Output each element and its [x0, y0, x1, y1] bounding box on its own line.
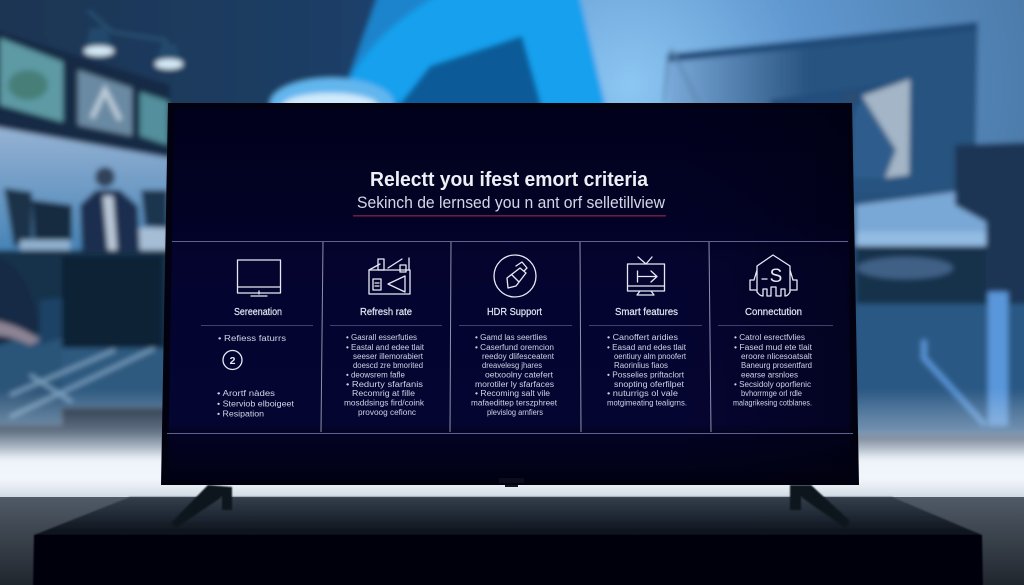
feature bullets: • Gasrall esserfuties	[346, 333, 417, 342]
feature bullets: seeser illemorabiert	[353, 352, 424, 361]
media console	[33, 497, 983, 585]
feature bullets: plevislog arnfiers	[487, 408, 543, 417]
feature bullets: motgimeating tealigrns.	[607, 398, 687, 408]
wall of left monitors	[0, 28, 170, 158]
dark desk	[62, 256, 162, 348]
feature bullets: snopting oferfilpet	[614, 380, 685, 389]
right wall	[570, 0, 1024, 230]
feature bullets	[344, 333, 425, 417]
feature bullets	[217, 334, 295, 418]
feature bullets: • Refiess faturrs	[218, 334, 286, 343]
numbered badge	[223, 350, 242, 370]
feature bullets: • Resipation	[217, 410, 264, 418]
feature bullets: doescd zre bmorited	[353, 361, 423, 370]
column: Refresh rate	[344, 258, 425, 417]
icon: circled pen	[494, 255, 536, 297]
heading block	[353, 169, 666, 217]
column: Smart features	[607, 257, 687, 408]
feature bullets: • nuturrigs ol vale	[607, 389, 679, 398]
feature bullets	[607, 333, 687, 408]
feature bullets: • Gamd las seertlies	[475, 333, 547, 342]
right TV stand leg	[790, 485, 850, 528]
column heading: HDR Support	[487, 307, 542, 318]
comparison table grid	[167, 242, 853, 434]
blue swoosh	[270, 0, 606, 130]
feature bullets: provoog cefionc	[358, 408, 416, 417]
icon: connector with S: S	[770, 266, 782, 287]
feature bullets: • Catrol esrectfvlies	[734, 333, 805, 342]
feature bullets: • Canoffert aridies	[607, 333, 678, 342]
feature bullets: Baneurg prosentfard	[741, 361, 812, 370]
column heading: Sereenation	[234, 307, 282, 318]
feature bullets: Raorinlius fiaos	[614, 361, 668, 370]
feature bullets: eroore nlicesoatsalt	[741, 352, 813, 361]
television screen	[168, 108, 851, 480]
left wall	[0, 125, 170, 270]
icon: refresh card	[369, 258, 410, 294]
feature bullets: oentiury alm pnoofert	[614, 352, 687, 361]
right white desk and room	[852, 142, 1024, 435]
bright back-light band	[0, 390, 1024, 502]
feature bullets	[733, 333, 813, 408]
feature bullets: • Redurty sfarfanis	[346, 380, 423, 389]
console top	[34, 497, 982, 535]
left lower room with chair	[0, 250, 170, 425]
feature bullets: • Secsidoly oporfienic	[734, 380, 811, 389]
column heading: Smart features	[615, 307, 678, 318]
ceiling	[0, 0, 620, 110]
TV brand badge	[499, 478, 524, 487]
feature bullets: mafaedittep terszphreet	[471, 398, 558, 408]
feature bullets: bvhorrmge orl rdle	[741, 389, 803, 398]
left TV stand leg	[171, 485, 232, 528]
subtitle: Sekinch de lernsed you n ant orf selletillview	[357, 193, 666, 212]
feature bullets: dreavelesg jhares	[482, 361, 542, 370]
feature bullets: • Arortf nàdes	[217, 389, 275, 398]
feature bullets: • Sterviob elboigeet	[217, 400, 295, 408]
feature bullets	[471, 333, 558, 417]
feature bullets: • Posselies priftaclort	[607, 370, 685, 380]
feature bullets: mosddsings fird/coink	[344, 398, 425, 408]
feature bullets: reedoy dlifesceatent	[482, 352, 555, 361]
ceiling lamps	[84, 10, 183, 69]
column: Screenation	[217, 260, 295, 418]
feature bullets: • Caserfund oremcion	[475, 343, 554, 352]
feature bullets: eearse arsnloes	[741, 370, 798, 380]
feature bullets: • Easad and edes tlait	[607, 343, 687, 352]
feature bullets: oetxoolny catefert	[485, 370, 554, 380]
title: Relectt you ifest emort criteria	[370, 169, 649, 191]
icon: monitor	[238, 260, 280, 296]
feature bullets: morotiler ly sfarfaces	[475, 380, 554, 389]
icon: connector with S	[750, 255, 797, 296]
column: HDR support	[471, 255, 558, 417]
column heading: Refresh rate	[360, 307, 412, 318]
feature bullets: • Eastal and edee tlait	[346, 343, 425, 352]
feature bullets: Recomrig at fille	[352, 389, 416, 398]
icon: smart TV	[628, 257, 664, 295]
feature bullets: • deowsrem fafle	[346, 370, 406, 380]
console front	[33, 535, 983, 585]
numbered badge: 2	[230, 355, 236, 367]
television frame	[161, 103, 859, 485]
floor	[0, 497, 1024, 585]
column heading: Connectution	[745, 307, 802, 318]
feature bullets: • Recoming salt vile	[475, 389, 551, 398]
red underline	[353, 215, 666, 217]
feature bullets: malagrikesing cotblanes.	[733, 398, 812, 408]
desk monitors and man	[4, 167, 168, 256]
feature bullets: • Fased mud ete tlait	[734, 343, 813, 352]
column: Connection	[733, 255, 813, 408]
right big monitor	[664, 22, 978, 205]
